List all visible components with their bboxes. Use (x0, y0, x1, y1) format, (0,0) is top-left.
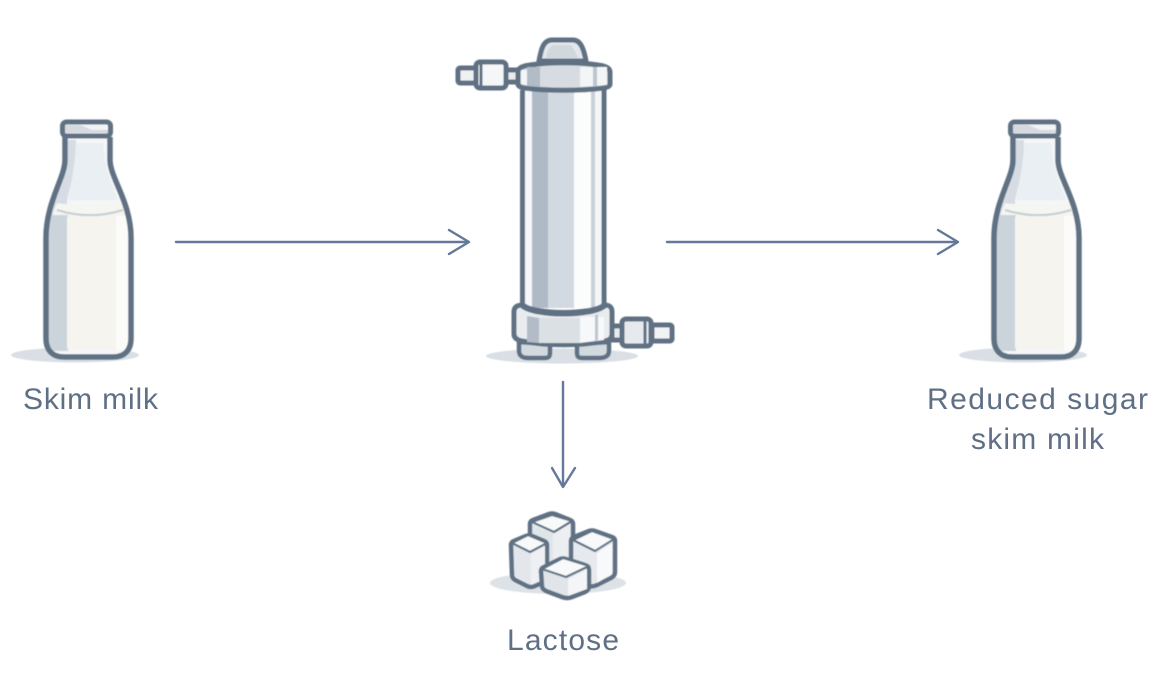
feet (519, 342, 609, 358)
icon: reduced sugar milk bottle (959, 122, 1087, 362)
arrow: filter to lactose (552, 382, 575, 487)
left connector (458, 62, 519, 88)
icon: skim milk bottle (11, 122, 139, 362)
arrow: skim milk to filter (176, 230, 469, 254)
top dome (539, 40, 586, 61)
bottom collar (514, 305, 612, 345)
right connector (612, 319, 672, 346)
label: reduced sugar skim milk (927, 383, 1148, 456)
arrow: filter to reduced sugar milk (667, 230, 958, 254)
back cube (530, 514, 573, 570)
left cube (511, 536, 547, 587)
column body (522, 88, 605, 308)
icon: lactose sugar cubes (490, 514, 626, 598)
icon: filtration column (458, 40, 672, 364)
right cube (571, 530, 615, 586)
top cap (518, 63, 610, 90)
label: skim milk: Skim milk (23, 383, 159, 416)
label: reduced sugar skim milk: Reduced sugar (927, 383, 1148, 416)
label: reduced sugar skim milk: skim milk (971, 423, 1105, 456)
label: lactose: Lactose (507, 624, 619, 657)
